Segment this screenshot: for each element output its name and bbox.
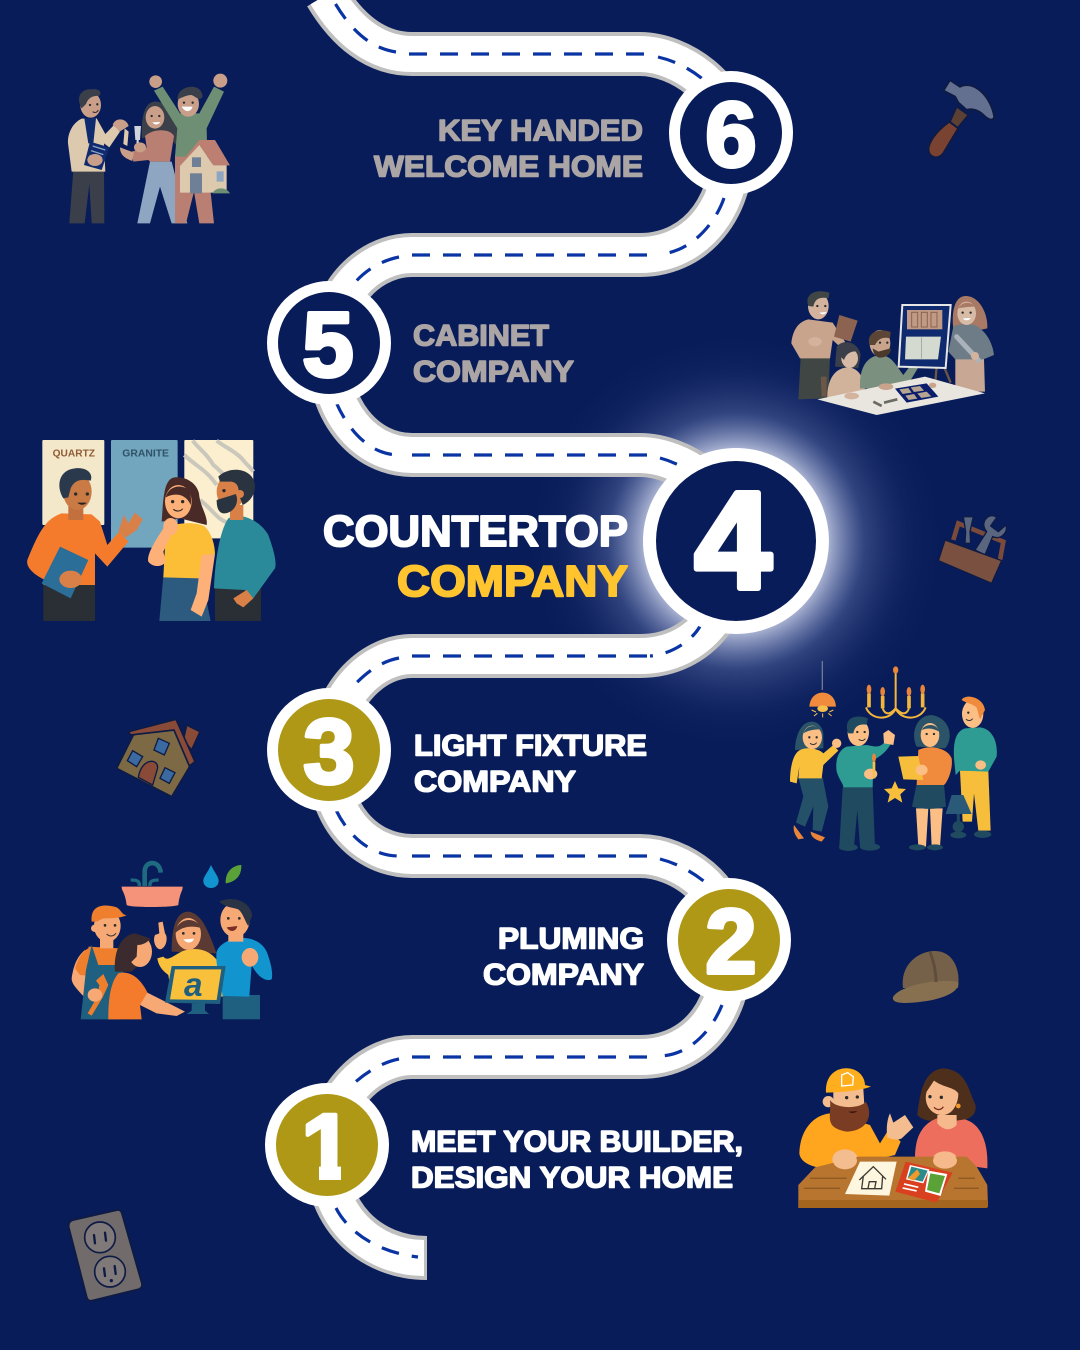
- illustration: plumbing team: [72, 863, 272, 1019]
- glow behind step 4: [521, 326, 951, 756]
- stone samples: [42, 440, 253, 548]
- stone samples: GRANITE: [122, 449, 169, 460]
- step 3 marker: 3: [303, 701, 355, 803]
- heading: step 1: MEET YOUR BUILDER,: [411, 1126, 743, 1158]
- builder: [799, 1068, 913, 1169]
- heading: step 2: COMPANY: [483, 958, 644, 992]
- dancing woman: [790, 722, 841, 842]
- step 4 marker: 4: [695, 464, 772, 618]
- man in blue: [216, 899, 272, 1019]
- heading: step 3: COMPANY: [414, 766, 576, 798]
- heading: step 5: [413, 320, 574, 388]
- step 5 marker: 5: [302, 294, 354, 396]
- heading: step 4: COMPANY: [397, 557, 628, 606]
- illustration: light fixture team: [790, 661, 997, 851]
- woman at computer: [108, 933, 185, 1019]
- stone samples: QUARTZ: [53, 449, 96, 460]
- heading: step 4: [323, 507, 628, 606]
- woman with glass: [120, 102, 187, 223]
- icon: toolbox: [938, 516, 1006, 583]
- salesman with tablet: [27, 468, 143, 621]
- winding road: [326, 0, 735, 1258]
- bearded man: [860, 330, 919, 390]
- man in yellow trousers and table lamp: [946, 697, 997, 838]
- woman pointing: [154, 912, 223, 997]
- plumber: [72, 906, 127, 1019]
- star: [884, 781, 906, 803]
- heading: step 6: KEY HANDED: [438, 114, 643, 148]
- leaf: [226, 865, 241, 883]
- house: [178, 140, 230, 193]
- step 2 marker: 2: [705, 891, 757, 993]
- step 3 marker: [267, 688, 391, 812]
- woman with paper: [898, 715, 952, 850]
- heading: step 1: [411, 1126, 743, 1194]
- icon: hard hat: [893, 951, 959, 1003]
- red brochure: [895, 1162, 953, 1203]
- icon: small house: [117, 719, 200, 797]
- heading: step 1: DESIGN YOUR HOME: [411, 1162, 733, 1194]
- illustration: key handover: [68, 74, 230, 223]
- step 6 marker: 6: [705, 84, 757, 186]
- bearded man: [214, 470, 276, 621]
- man with door sample: [791, 291, 858, 399]
- table with samples: [817, 377, 985, 415]
- cheering man: [149, 74, 227, 223]
- table: [798, 1152, 988, 1208]
- heading: step 2: [483, 922, 644, 992]
- woman thinking: [148, 477, 215, 621]
- heading: step 6: WELCOME HOME: [374, 150, 643, 184]
- heading: step 3: [414, 730, 647, 798]
- client woman: [915, 1068, 987, 1169]
- water drop: [203, 865, 219, 888]
- heading: step 2: PLUMING: [498, 922, 644, 956]
- icon: wall outlet: [69, 1210, 142, 1301]
- man with candle: [836, 716, 895, 851]
- woman with wrench: [948, 296, 994, 392]
- floor plan sheet: [845, 1162, 897, 1196]
- step 2 marker: [667, 878, 791, 1002]
- illustration: builder meeting: [798, 1068, 988, 1208]
- step 6 marker: [669, 71, 793, 195]
- heading: step 5: CABINET: [413, 320, 549, 352]
- step 4 marker: [643, 448, 829, 634]
- illustration: cabinet selection: [791, 291, 994, 415]
- heading: step 5: COMPANY: [413, 356, 574, 388]
- sink with faucet: [122, 863, 183, 907]
- heading: step 3: LIGHT FIXTURE: [414, 730, 647, 762]
- heading: step 6: [374, 114, 643, 184]
- computer monitor: [165, 966, 226, 1014]
- computer monitor: a: [184, 967, 203, 1004]
- seated woman: [821, 342, 865, 398]
- design board: [899, 305, 951, 383]
- heading: step 4: COUNTERTOP: [323, 507, 628, 556]
- pendant lamp: [809, 661, 836, 717]
- step 1 marker: 1: [301, 1096, 353, 1198]
- illustration: countertop showroom: [27, 440, 276, 621]
- step 5 marker: [267, 281, 391, 405]
- icon: hammer: [928, 80, 994, 157]
- chandelier: [866, 666, 926, 718]
- agent handing keys: [68, 89, 129, 223]
- step 1 marker: [265, 1083, 389, 1207]
